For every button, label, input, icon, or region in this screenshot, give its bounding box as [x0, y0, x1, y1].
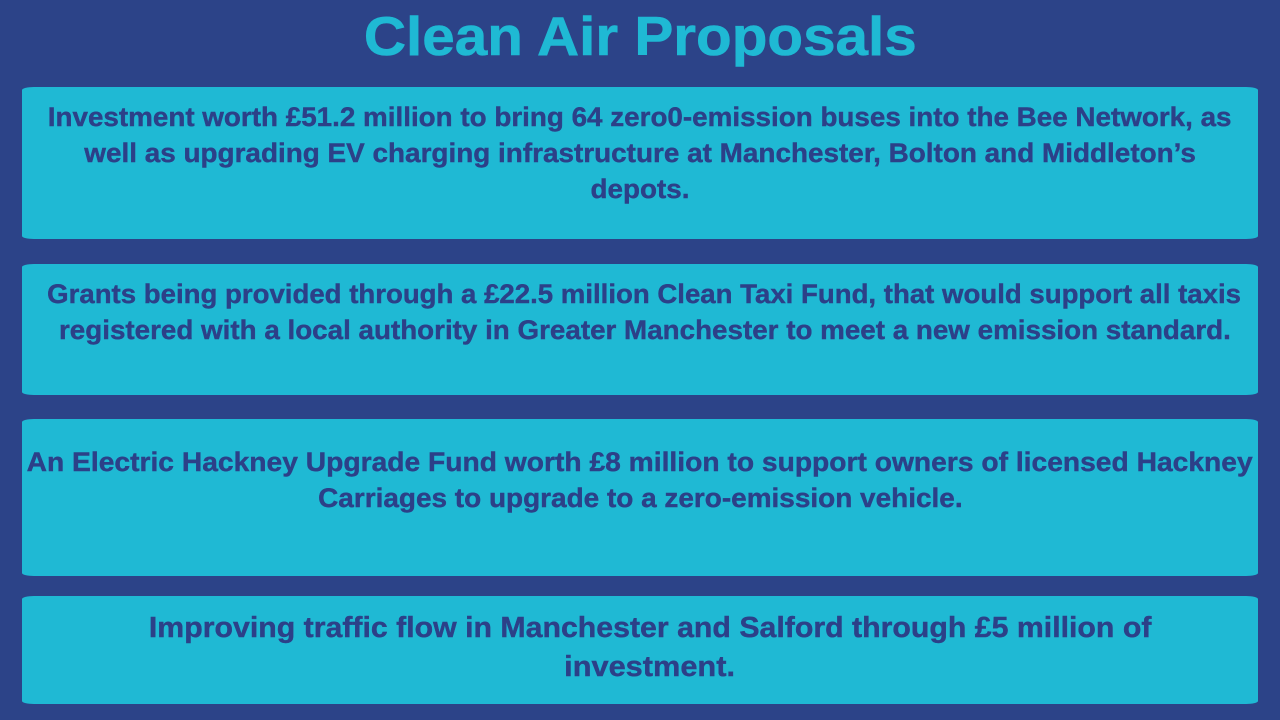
text: hackney fund: Carriages to upgrade to a zero-emission vehicle.: [318, 483, 962, 513]
text: taxi fund: registered with a local authority in Greater Manchester to meet a new emission standard.: [59, 315, 1230, 345]
text: taxi fund: [47, 279, 1241, 345]
text: bus investment: depots.: [591, 174, 689, 204]
panel: traffic flow: [22, 596, 1258, 704]
text: traffic flow: investment.: [565, 651, 735, 683]
panel: hackney fund: [22, 419, 1258, 576]
panel: taxi fund: [22, 264, 1258, 395]
text: hackney fund: An Electric Hackney Upgrade Fund worth £8 million to support owners of licensed Hackney: [27, 447, 1253, 477]
text: bus investment: well as upgrading EV charging infrastructure at Manchester, Bolton and Middleton’s: [84, 138, 1196, 168]
text: traffic flow: Improving traffic flow in Manchester and Salford through £5 million of: [149, 612, 1151, 644]
text: hackney fund: [27, 447, 1253, 513]
text: bus investment: [48, 102, 1232, 204]
panel: bus investment: [22, 87, 1258, 239]
text: bus investment: Investment worth £51.2 million to bring 64 zero0-emission buses into the Bee Network, as: [48, 102, 1232, 132]
text: taxi fund: Grants being provided through a £22.5 million Clean Taxi Fund, that would support all taxis: [47, 279, 1241, 309]
text: traffic flow: [149, 612, 1152, 683]
title: Clean Air Proposals: [364, 5, 916, 67]
